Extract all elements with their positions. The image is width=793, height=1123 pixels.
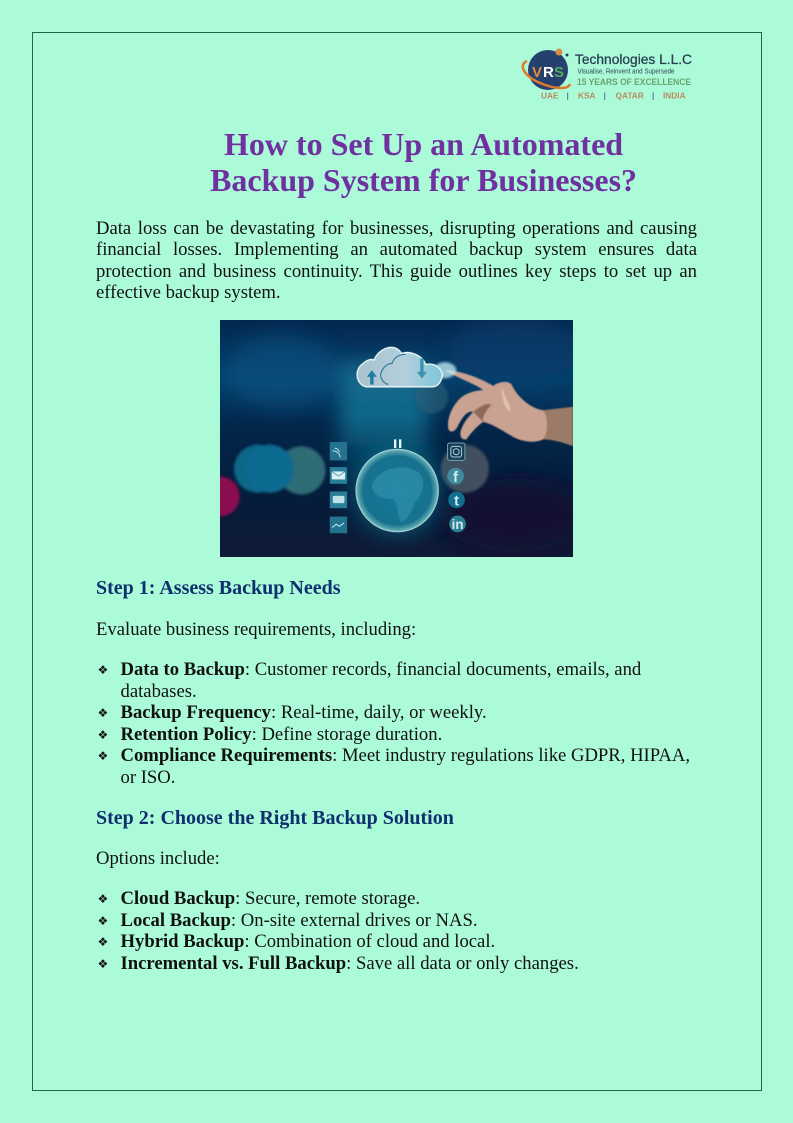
hero image: cloud and globe <box>220 320 573 557</box>
step 2 list: ❖ <box>98 914 108 928</box>
right icons <box>447 443 466 532</box>
icon: globe: V <box>532 64 542 81</box>
step 1 list: ❖ <box>98 728 108 742</box>
step 1 intro: Evaluate business requirements, including: <box>96 619 416 640</box>
icon: globe: S <box>554 64 564 81</box>
logo locations: | <box>652 90 654 100</box>
hand <box>445 370 573 446</box>
cloud <box>357 347 456 387</box>
icon: globe <box>523 48 570 90</box>
logo locations: | <box>604 90 606 100</box>
heading: step 1: Step 1: Assess Backup Needs <box>96 577 340 599</box>
step 1 list <box>98 659 690 788</box>
right icons: f <box>453 470 458 486</box>
logo tagline: Visualise, Reinvent and Supersede <box>578 66 674 76</box>
step 2 list: ❖ <box>98 935 108 949</box>
logo locations: | <box>566 90 569 100</box>
step 1 list: ❖ <box>98 749 108 763</box>
step 1 list: Compliance Requirements: Meet industry regulations like GDPR, HIPAA, <box>120 745 690 766</box>
step 1 list: databases. <box>120 680 197 702</box>
left icons <box>330 442 347 533</box>
step 2 list: Cloud Backup: Secure, remote storage. <box>120 888 420 909</box>
step 2 intro: Options include: <box>96 848 220 869</box>
step 2 list: Hybrid Backup: Combination of cloud and local. <box>120 931 495 952</box>
intro paragraph <box>96 218 697 303</box>
step 2 list: Local Backup: On-site external drives or NAS. <box>120 910 478 930</box>
image background <box>220 320 573 557</box>
intro paragraph: Data loss can be devastating for businesses, disrupting operations and causing <box>96 218 697 239</box>
intro paragraph: protection and business continuity. This guide outlines key steps to set up an <box>96 261 697 282</box>
logo locations: KSA <box>578 90 596 100</box>
logo locations: UAE <box>541 90 559 100</box>
logo name: Technologies L.L.C <box>575 52 692 67</box>
title <box>210 126 637 198</box>
step 2 list: Incremental vs. Full Backup: Save all data or only changes. <box>120 952 579 974</box>
step 2 list: ❖ <box>98 956 108 970</box>
step 1 list: Data to Backup: Customer records, financial documents, emails, and <box>120 659 641 680</box>
logo <box>522 48 692 100</box>
heading: step 2: Step 2: Choose the Right Backup Solution <box>96 806 454 828</box>
step 2 list: ❖ <box>98 892 108 906</box>
right icons: t <box>454 494 459 510</box>
step 1 list: Backup Frequency: Real-time, daily, or weekly. <box>120 702 487 723</box>
logo locations: INDIA <box>663 90 686 100</box>
step 1 list: or ISO. <box>120 766 175 788</box>
step 1 list: ❖ <box>98 706 108 720</box>
title: How to Set Up an Automated <box>224 126 623 162</box>
intro paragraph: effective backup system. <box>96 282 281 303</box>
title: Backup System for Businesses? <box>210 162 637 198</box>
globe <box>350 439 444 537</box>
icon: globe: R <box>543 64 554 81</box>
logo years text: 15 YEARS OF EXCELLENCE <box>577 77 691 88</box>
intro paragraph: financial losses. Implementing an automated backup system ensures data <box>96 239 697 260</box>
blurred lights <box>200 380 489 517</box>
step 2 list <box>98 888 579 974</box>
step 1 list: Retention Policy: Define storage duration. <box>120 724 442 744</box>
logo locations: QATAR <box>616 90 644 100</box>
right icons: in <box>452 517 463 532</box>
step 1 list: ❖ <box>98 663 108 677</box>
